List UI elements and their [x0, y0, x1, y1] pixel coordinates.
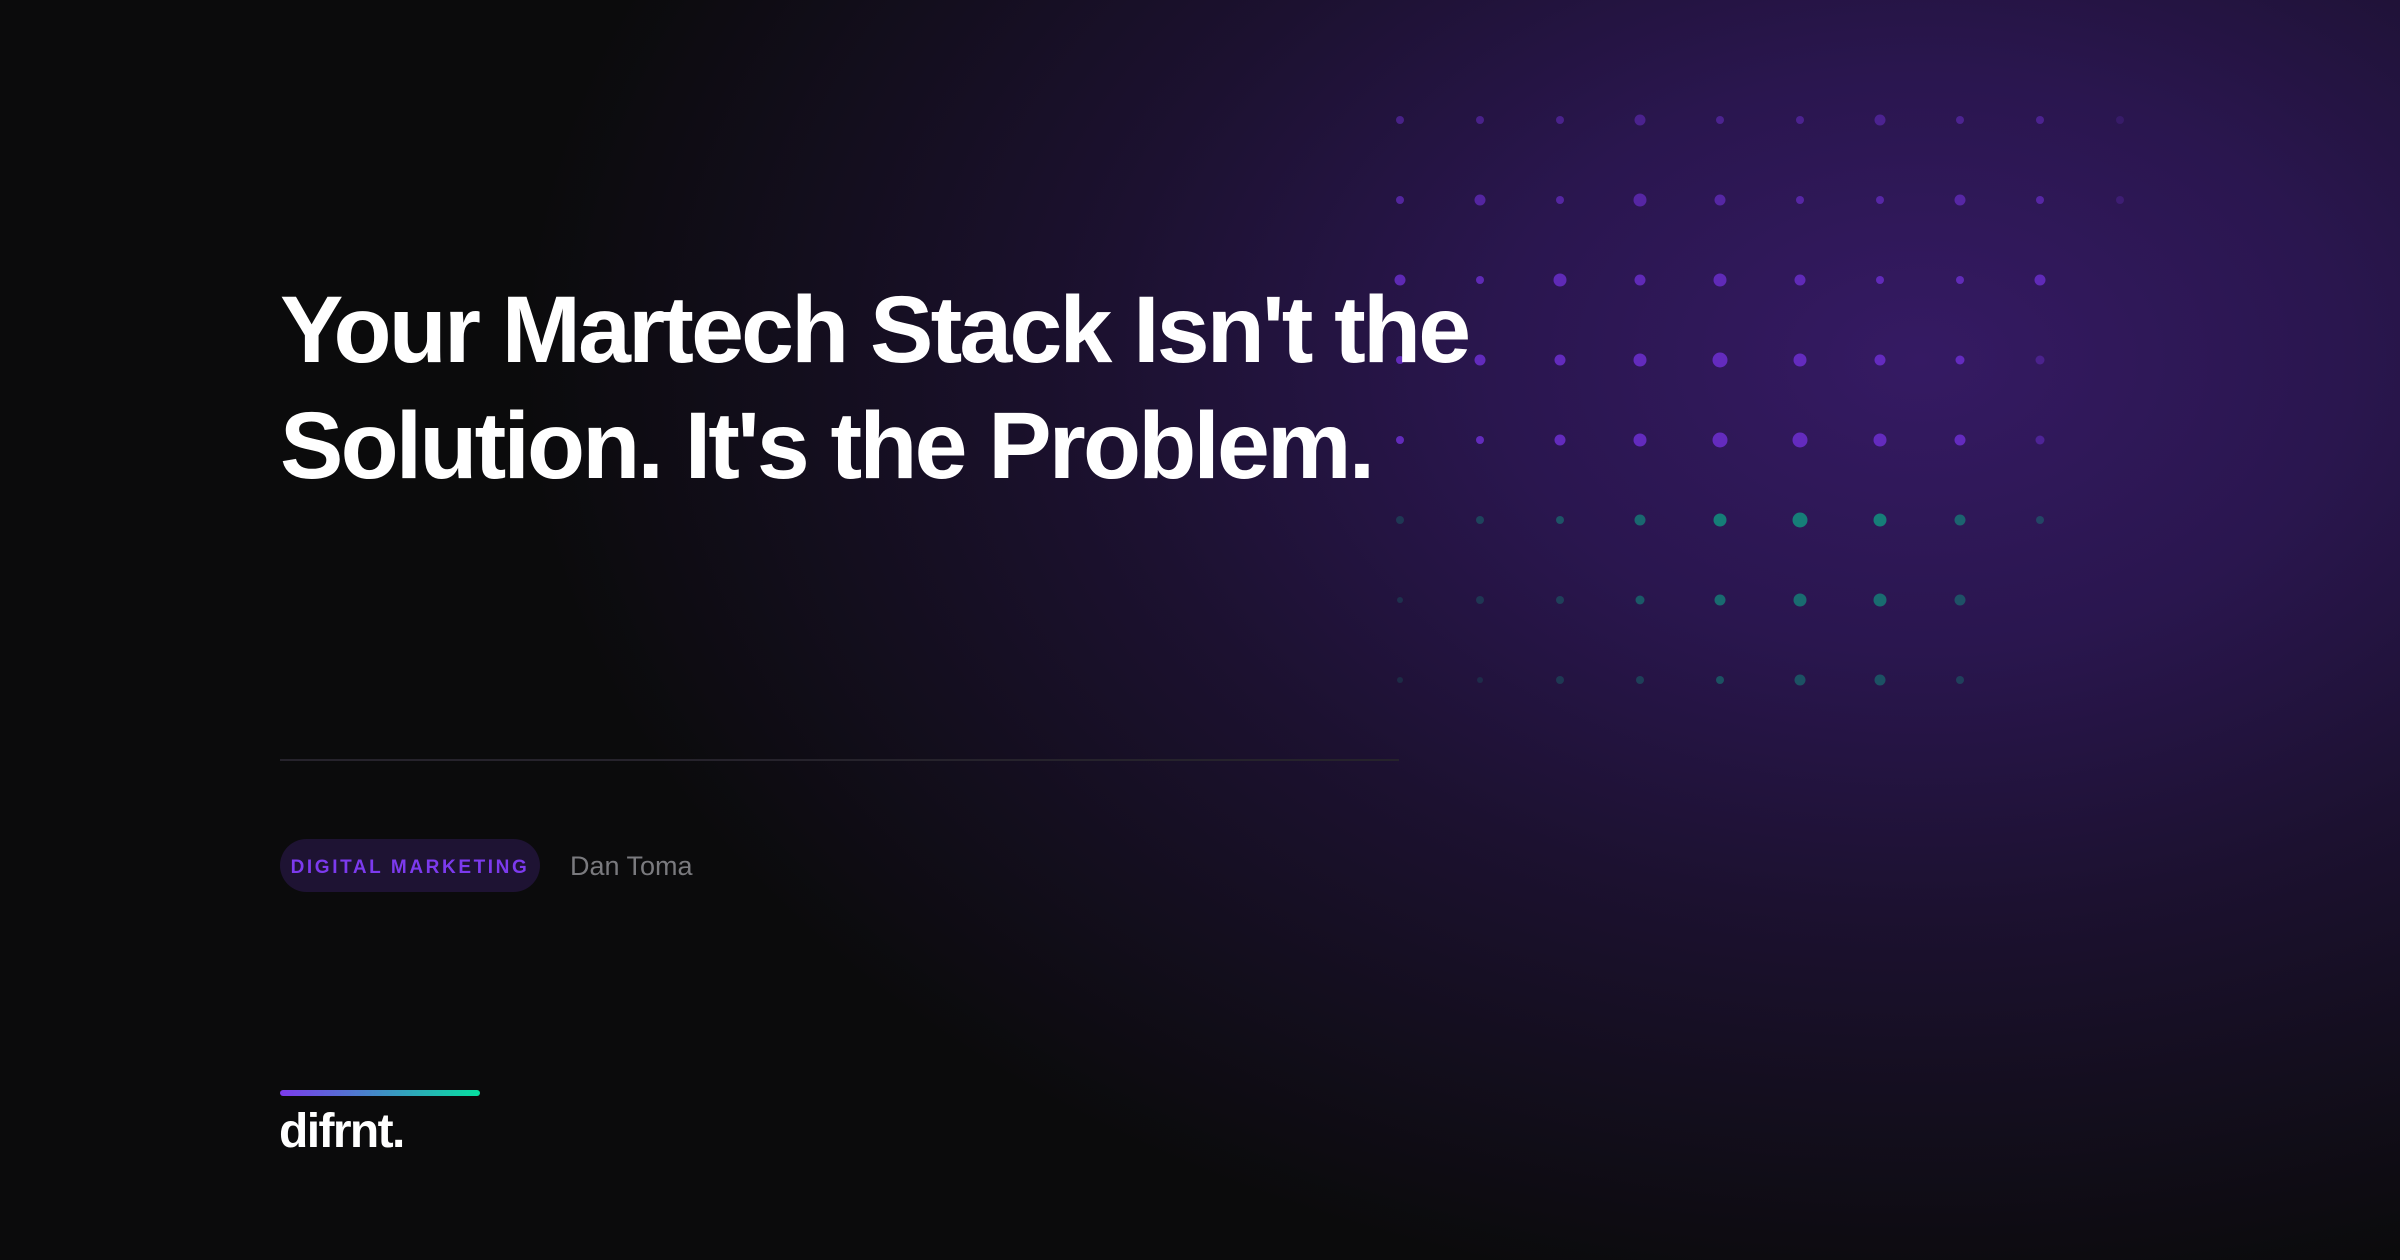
gradient bar [280, 1090, 480, 1096]
author: Dan Toma [570, 851, 693, 881]
title [280, 277, 1468, 499]
category pill [280, 839, 540, 892]
logo: difrnt. [279, 1105, 404, 1158]
title: Solution. It's the Problem. [280, 393, 1372, 499]
title: Your Martech Stack Isn't the [280, 277, 1468, 383]
category pill: DIGITAL MARKETING [291, 857, 529, 878]
